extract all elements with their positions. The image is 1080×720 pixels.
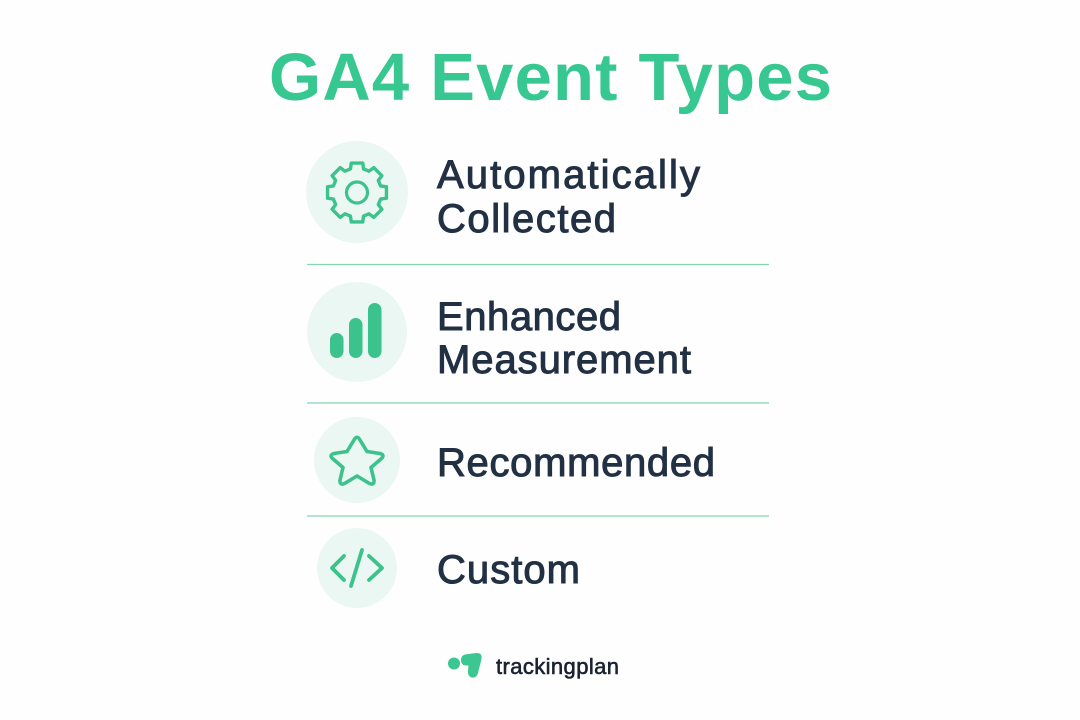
row: Automatically Collected — [306, 141, 700, 243]
label: Recommended: Recommended — [437, 441, 715, 485]
label: Custom: Custom — [437, 548, 580, 592]
label: Enhanced Measurement: Measurement — [437, 338, 691, 382]
icon: gear — [306, 141, 408, 243]
icon: star — [314, 417, 400, 503]
label: Automatically Collected: Collected — [437, 197, 616, 241]
label: Enhanced Measurement: Enhanced — [437, 295, 621, 339]
label: Automatically Collected: Automatically — [437, 153, 700, 197]
icon: bar chart — [307, 282, 407, 382]
icon: code brackets — [317, 528, 397, 608]
title: GA4 Event Types — [269, 40, 832, 115]
row: Enhanced Measurement — [307, 282, 691, 382]
row: Recommended — [314, 417, 715, 503]
row: Custom — [317, 528, 580, 608]
logo: trackingplan: trackingplan — [496, 654, 619, 679]
logo: trackingplan — [448, 653, 619, 679]
label: Enhanced Measurement — [437, 295, 691, 382]
label: Automatically Collected — [437, 153, 700, 241]
